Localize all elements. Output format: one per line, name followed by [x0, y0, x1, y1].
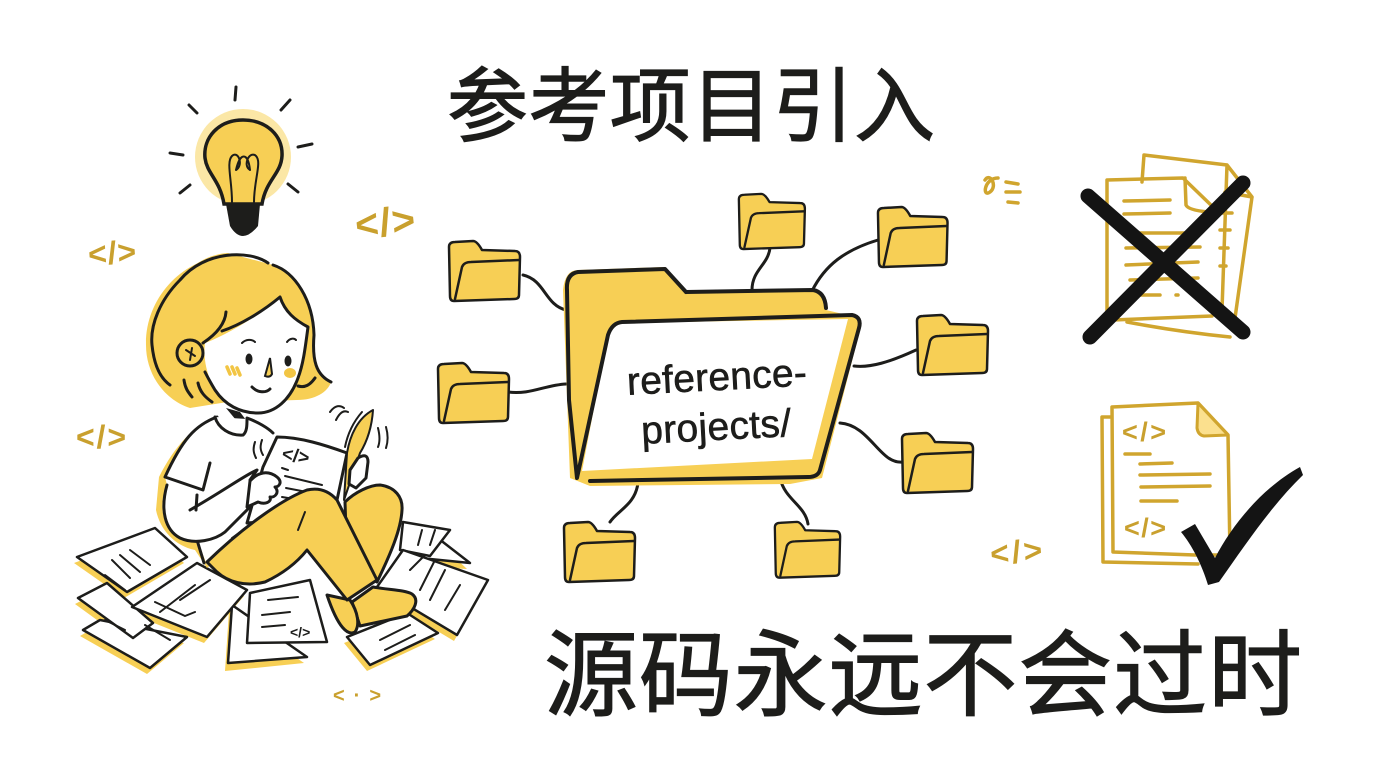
tagline: 源码永远不会过时: [544, 623, 1302, 728]
face: [204, 297, 307, 413]
code tags: </>: [989, 532, 1044, 572]
code tags: <·>: [333, 685, 381, 707]
motion marks: [254, 406, 388, 458]
hair shadow: [146, 256, 240, 408]
scattered papers: </>: [290, 624, 310, 640]
front leg: [207, 489, 377, 600]
scattered papers: [74, 522, 488, 674]
folder label: projects/: [640, 402, 792, 453]
central folder: [563, 267, 860, 486]
illustration: person reading on papers: [74, 253, 488, 674]
code tags: [76, 178, 1044, 707]
eyes and mouth: [227, 339, 296, 392]
shirt shadow: [156, 417, 240, 568]
icon: approved code document: </>: [1122, 417, 1166, 447]
illustration: person reading on papers: </>: [280, 444, 311, 469]
code tags: </>: [76, 419, 126, 455]
back foot: [327, 595, 358, 633]
icon: approved code document: [1102, 403, 1303, 585]
icon: light bulb: [170, 87, 312, 236]
connector lines: [508, 240, 916, 524]
code tags: </>: [87, 233, 137, 272]
back leg: [345, 485, 402, 582]
front foot: [352, 587, 416, 626]
small folders: [438, 194, 988, 582]
folder label: [626, 351, 808, 453]
code tags: </>: [353, 198, 417, 248]
collar: [215, 417, 247, 435]
hands: [349, 456, 368, 488]
title: 参考项目引入: [447, 63, 935, 153]
icon: crossed out documents: [1088, 155, 1252, 337]
folder outlines: [567, 269, 860, 481]
folder label: reference-: [626, 351, 808, 404]
ear: [177, 340, 203, 366]
open book: [247, 437, 347, 523]
hair: [152, 253, 331, 403]
icon: approved code document: </>: [1124, 513, 1166, 543]
folder yellow body: [563, 267, 860, 486]
shirt: [162, 417, 273, 565]
folder front page: [582, 319, 848, 471]
arm: [164, 470, 260, 541]
